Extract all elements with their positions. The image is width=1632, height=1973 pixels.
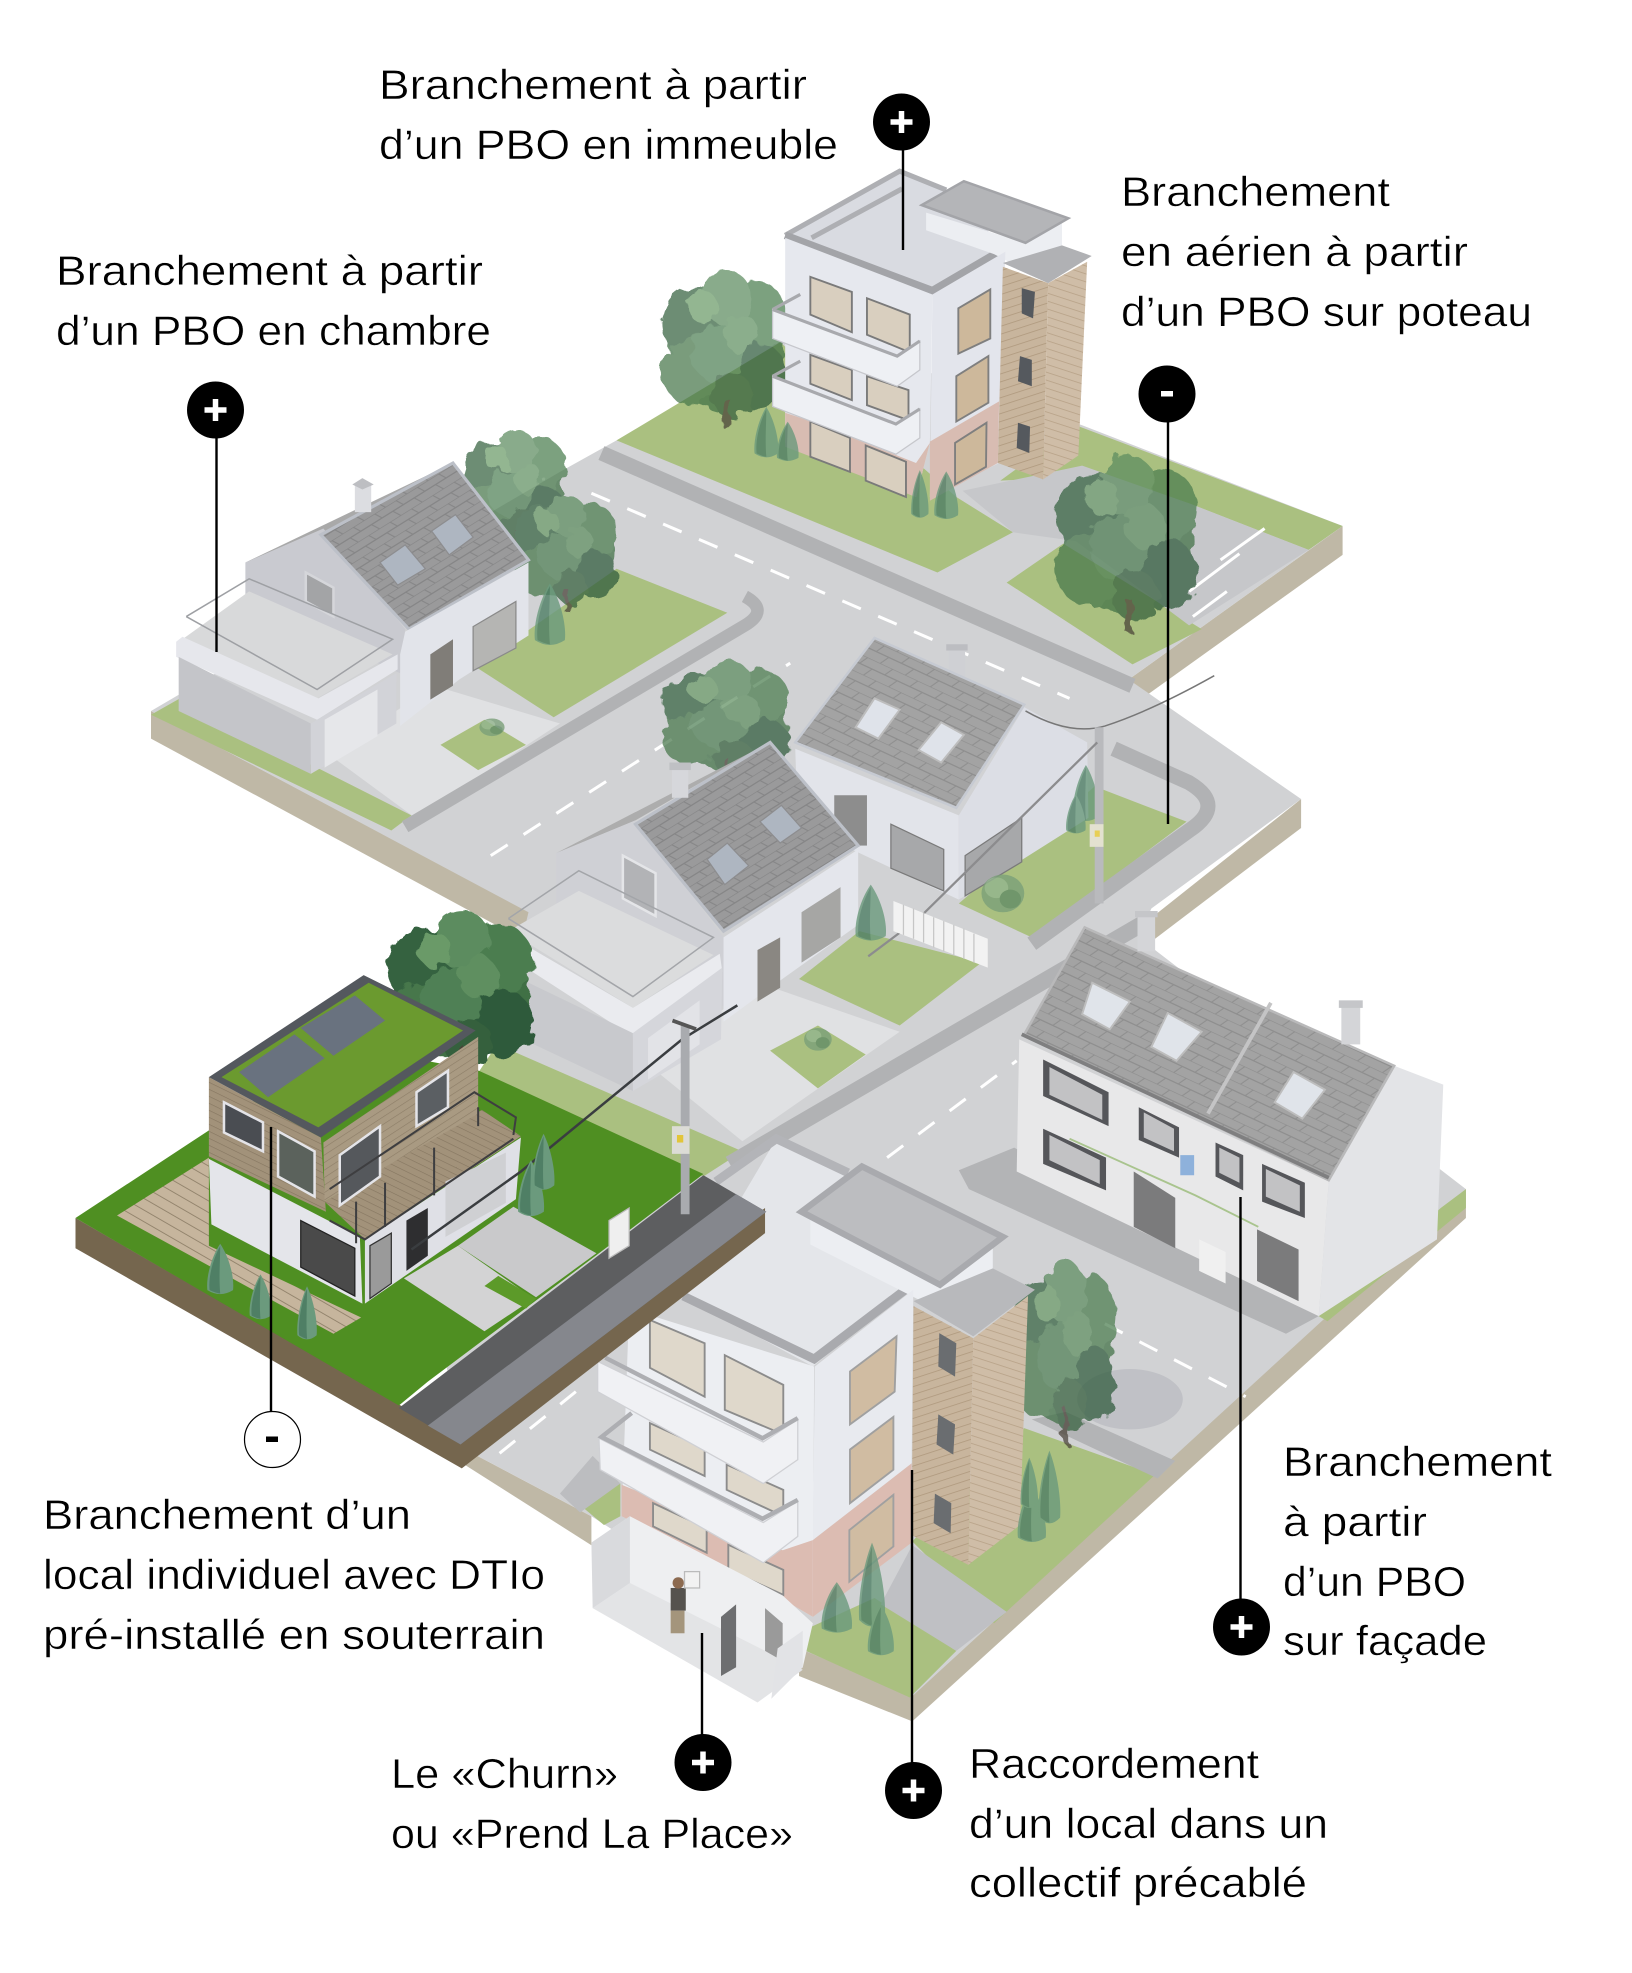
left facade: [785, 238, 932, 497]
illustration: isometric neighbourhood: [75, 171, 1466, 1721]
main roof: [785, 171, 1005, 293]
callout: PBO sur poteau: [1121, 168, 1532, 824]
right facade: [930, 252, 1005, 497]
plus marker: [187, 382, 244, 438]
label: collectif précablé: [969, 1859, 1307, 1906]
upper walls: [209, 1077, 326, 1212]
label: Raccordement: [969, 1740, 1259, 1787]
label: Branchement: [1283, 1438, 1552, 1485]
solar panels: [239, 1034, 325, 1097]
callout: PBO en immeuble: [379, 61, 930, 250]
label: sur façade: [1283, 1617, 1487, 1664]
soil side: [75, 1208, 765, 1468]
green roof: [209, 975, 476, 1138]
leader line: [911, 1470, 913, 1764]
callout: PBO sur façade: [1213, 1197, 1552, 1664]
wooden deck: [117, 1158, 361, 1334]
green lawn: [75, 1044, 703, 1406]
kerbs and sidewalks: [405, 453, 1208, 1164]
house 3: [795, 638, 1088, 900]
sidewalk in front of row houses: [959, 1148, 1319, 1334]
windows: [224, 1102, 263, 1151]
parking and pavements: [560, 466, 1309, 1651]
roof: [683, 1139, 914, 1367]
foreground plot in full colour: [75, 911, 766, 1468]
tree in middle: [662, 661, 789, 783]
basement cutaway: [591, 1516, 813, 1701]
lower walls: [209, 1159, 362, 1304]
paved walk: [404, 1246, 534, 1331]
label: ou «Prend La Place»: [391, 1810, 793, 1857]
label: [43, 1491, 545, 1658]
leader line: [701, 1633, 703, 1736]
balconies: [773, 310, 920, 454]
terrace: [508, 891, 713, 1008]
roof: [321, 463, 528, 629]
label: [969, 1740, 1328, 1906]
wood tower: [998, 267, 1048, 479]
technician: [671, 1572, 700, 1633]
trees behind first house: [463, 429, 616, 611]
side wall: [400, 562, 528, 726]
lower block: [179, 657, 311, 774]
leader line: [215, 430, 218, 652]
callout: PBO en chambre: [56, 247, 491, 652]
label: d’un PBO: [1283, 1558, 1466, 1605]
left facade: [622, 1309, 814, 1617]
label: Branchement à partir: [379, 61, 807, 108]
apartment building top: [773, 171, 1092, 501]
road dashes: [491, 493, 1265, 1453]
windows: [650, 1320, 783, 1595]
house 1: [176, 463, 528, 774]
lawns washed: [151, 342, 1466, 1697]
callout: DTIo souterrain: [43, 1127, 545, 1658]
label: pré-installé en souterrain: [43, 1611, 545, 1658]
label: en aérien à partir: [1121, 228, 1468, 275]
minus marker: [1138, 366, 1196, 422]
label: Branchement à partir: [56, 247, 483, 294]
gable wall: [245, 528, 405, 673]
callout: Churn: [391, 1633, 793, 1857]
row houses: [1017, 911, 1443, 1316]
rooftop box: [926, 213, 1062, 271]
label: local individuel avec DTIo: [43, 1551, 545, 1598]
white fence: [893, 901, 988, 968]
overhead wire to house: [411, 1005, 737, 1249]
leader line: [270, 1127, 272, 1411]
soil slabs of the washed-out neighbourhood: [151, 526, 1466, 1721]
white cabinet: [609, 1208, 629, 1258]
label: [379, 61, 838, 168]
conifers near pole: [981, 765, 1099, 912]
label: [391, 1750, 793, 1857]
label: [1121, 168, 1532, 335]
wood tower: [912, 1306, 973, 1565]
tree behind house: [387, 911, 533, 1078]
ground plane: [151, 330, 1466, 1696]
label: d’un PBO sur poteau: [1121, 288, 1532, 335]
label: [1283, 1438, 1552, 1664]
label: d’un PBO en immeuble: [379, 121, 838, 168]
leader line: [1167, 420, 1169, 824]
leader line: [1239, 1197, 1242, 1599]
house 2: [506, 742, 858, 1091]
right facade: [813, 1290, 913, 1540]
driveway: [458, 1207, 596, 1297]
plus marker: [873, 94, 930, 150]
label: d’un PBO en chambre: [56, 307, 491, 354]
rooftop box: [810, 1219, 993, 1311]
upper pole: [1090, 727, 1104, 903]
dark road strip: [399, 1175, 766, 1445]
tree on parking: [1057, 456, 1197, 632]
callout: collectif précablé: [885, 1470, 1328, 1906]
terrace deck: [325, 1110, 521, 1239]
plus marker: [674, 1734, 732, 1791]
utility pole: [672, 1019, 697, 1214]
label: d’un local dans un: [969, 1800, 1328, 1847]
plus marker: [1213, 1598, 1270, 1656]
conifers: [207, 1244, 233, 1294]
conifers by the apartment: [754, 407, 958, 519]
balconies: [598, 1361, 798, 1563]
small lawn over paving: [440, 720, 866, 1088]
label: Branchement: [1121, 168, 1390, 215]
railing: [330, 1092, 516, 1243]
conifers bottom: [821, 1451, 1060, 1655]
label: [56, 247, 491, 354]
plus marker: [885, 1762, 942, 1819]
label: Branchement d’un: [43, 1491, 411, 1538]
label: Le «Churn»: [391, 1750, 618, 1797]
label: à partir: [1283, 1498, 1427, 1545]
chimney: [352, 478, 374, 512]
apartment building bottom: [591, 1139, 1035, 1702]
tree lower right: [1013, 1261, 1116, 1443]
outlined minus marker: [244, 1412, 300, 1468]
tree behind apartment block: [662, 269, 787, 428]
windows: [810, 277, 910, 497]
terrace: [182, 591, 393, 698]
overhead wires upper: [1026, 676, 1214, 729]
leader line: [902, 150, 904, 250]
